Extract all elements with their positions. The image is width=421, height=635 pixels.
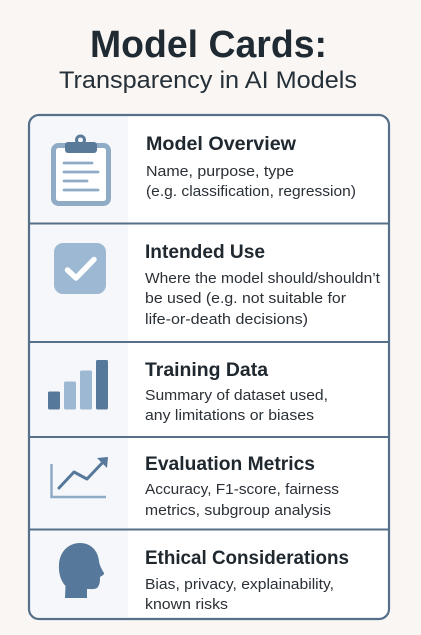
text: intended use description: life-or-death decisions) <box>145 311 308 328</box>
text: intended use description <box>145 270 381 328</box>
text: training data description: any limitations or biases <box>145 407 314 424</box>
icon: clipboard <box>54 136 108 204</box>
heading: evaluation metrics: Evaluation Metrics <box>145 454 315 475</box>
row: ethical considerations <box>59 543 349 613</box>
title <box>59 24 357 94</box>
text: evaluation metrics description: Accuracy, F1-score, fairness <box>145 481 339 498</box>
icon: bar chart <box>48 360 108 410</box>
text: training data description: Summary of dataset used, <box>145 387 328 404</box>
row: training data <box>48 360 328 424</box>
heading: intended use: Intended Use <box>145 242 265 263</box>
text: ethical considerations description: Bias, privacy, explainability, <box>145 576 334 593</box>
row: intended use <box>54 242 381 328</box>
row: model overview <box>54 134 356 204</box>
text: intended use description: Where the model should/shouldn’t <box>145 270 381 287</box>
text: model overview description: Name, purpose, type <box>146 163 294 180</box>
title: Model Cards: <box>90 24 327 66</box>
icon: head profile <box>59 543 104 598</box>
text: ethical considerations description <box>145 576 334 613</box>
icon: line chart <box>52 457 108 497</box>
text: model overview description: (e.g. classification, regression) <box>146 183 356 200</box>
icon: check box <box>54 243 106 294</box>
title: Transparency in AI Models <box>59 67 357 94</box>
text: intended use description: be used (e.g. not suitable for <box>145 290 346 307</box>
text: training data description <box>145 387 328 424</box>
text: ethical considerations description: known risks <box>145 596 228 613</box>
row: evaluation metrics <box>52 454 339 519</box>
text: model overview description <box>146 163 356 200</box>
heading: training data: Training Data <box>145 360 268 381</box>
heading: model overview: Model Overview <box>146 134 296 155</box>
panel: model card table <box>29 115 389 619</box>
text: evaluation metrics description <box>145 481 339 519</box>
text: evaluation metrics description: metrics, subgroup analysis <box>145 502 331 519</box>
heading: ethical considerations: Ethical Considerations <box>145 548 349 569</box>
